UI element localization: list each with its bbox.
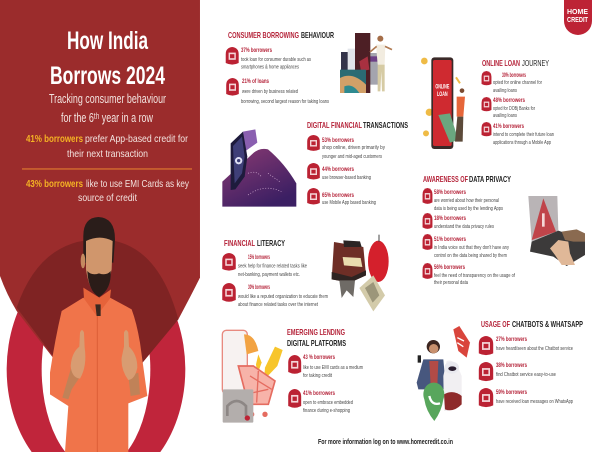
stat: 41%	[303, 390, 353, 414]
stat: 58%: data is being used by the lending Apps	[434, 206, 503, 212]
heading	[287, 327, 346, 348]
left hero panel	[0, 0, 200, 452]
stat: 53%: 53% borrowers	[322, 137, 354, 144]
icon: help	[222, 253, 236, 271]
stat: 38%: 38% borrowers	[496, 362, 527, 369]
stat: 27%: 27% borrowers	[496, 336, 527, 343]
stat: 65%: use Mobile App based banking	[322, 200, 376, 206]
icon: chatbot	[479, 336, 493, 355]
main title	[50, 27, 165, 90]
heading: EMERGING LENDING	[287, 327, 345, 337]
stat: 30%: availing loans	[493, 88, 517, 94]
stat: 41%: intend to complete their future loan	[493, 132, 554, 138]
stat: 15%: seek help for finance related tasks like	[238, 264, 307, 270]
highlight: app-based credit: their next transaction	[67, 148, 148, 160]
stat: 41%	[493, 123, 554, 146]
stat: 65%: 65% borrowers	[322, 192, 354, 199]
stat: 59%	[496, 389, 573, 405]
stat: 51%: 51% borrowers	[434, 236, 466, 243]
stat: 30%	[493, 72, 542, 94]
heading: ONLINE LOAN	[482, 58, 520, 68]
stat: 48%: opted for DOBj Banks for	[493, 106, 535, 112]
image: purple phone and card	[222, 129, 296, 207]
stat: 30%	[237, 284, 328, 308]
stat: 56%: 56% borrowers	[434, 264, 465, 271]
heading: TRANSACTIONS	[363, 120, 408, 130]
stat: 37%	[241, 47, 311, 70]
stat: 30%: opted for online channel for	[493, 80, 542, 86]
stat: 30%: would like a reputed organization to educate them	[237, 294, 328, 300]
stat: 37%: smartphones & home appliances	[241, 64, 299, 70]
icon: bank	[482, 97, 491, 111]
stat: 41%: 41% borrowers	[493, 123, 524, 130]
stat: 43%: like to use EMI cards as a medium	[303, 365, 363, 371]
stat: 51%	[434, 236, 509, 259]
heading: DIGITAL PLATFORMS	[287, 338, 346, 348]
image: wallet, cash and piggy bank	[332, 235, 389, 311]
subtitle: for the 6ᵗʰ year in a row	[61, 110, 153, 125]
stat: 18%	[434, 215, 494, 230]
section: consumer borrowing behaviour	[226, 30, 392, 105]
stat: 18%: understand the data privacy rules	[434, 224, 494, 230]
stat: 41%: open to embrace embedded	[303, 400, 353, 406]
Home Credit logo	[564, 0, 592, 35]
stat: 56%: their personal data	[434, 280, 468, 286]
Home Credit logo: CREDIT	[567, 15, 588, 24]
stat: 53%: shop online, driven primarily by	[322, 145, 385, 151]
section: digital financial transactions	[222, 120, 408, 207]
icon: control	[423, 234, 432, 250]
stat: 43%: 43 % borrowers	[303, 354, 335, 361]
icon: card	[288, 355, 301, 374]
stat: 38%	[496, 362, 556, 378]
icon: briefcase	[226, 78, 239, 96]
heading: CONSUMER BORROWING	[228, 30, 299, 40]
icon: cart	[288, 389, 301, 408]
stat: 41%: applications through a Mobile App	[493, 140, 551, 146]
highlight: EMI cards	[26, 178, 190, 204]
heading: DIGITAL FINANCIAL	[307, 120, 362, 130]
image: laptop with warning triangle	[528, 196, 585, 266]
stat: 27%	[496, 336, 573, 352]
stat: 37%: 37% borrowers	[241, 47, 272, 54]
footer link: For more information log on to www.homecredit.co.in	[318, 437, 453, 446]
highlight: app-based credit: 41% borrowers	[26, 133, 83, 145]
stat: 56%: feel the need of transparency on the usage of	[434, 273, 515, 279]
highlight: EMI cards: like to use EMI Cards as key	[86, 178, 190, 190]
stat: 21%: were driven by business related	[241, 89, 298, 95]
heading: USAGE OF	[481, 319, 510, 329]
dark inner arc	[17, 239, 178, 416]
Home Credit logo: HOME	[567, 7, 588, 16]
stat: 30%: 30% borrowers	[502, 72, 526, 79]
icon: rules	[423, 213, 432, 229]
image: appliances and man	[340, 33, 392, 93]
highlight: EMI cards: 43% borrowers	[26, 178, 83, 190]
image: phone with online loan	[421, 57, 465, 149]
stat: 21%: 21% of loans	[242, 78, 269, 85]
stat: 30%: 30% borrowers	[248, 284, 270, 291]
subtitle: Tracking consumer behaviour	[49, 91, 166, 106]
icon: transparency	[423, 263, 432, 279]
main title: Borrows 2024	[50, 62, 165, 90]
stat: 48%	[493, 97, 535, 119]
stat: 18%: 18% borrowers	[434, 215, 466, 222]
stat: 48%: availing loans	[493, 113, 517, 119]
stat: 37%: took loan for consumer durable such as	[241, 57, 311, 63]
stat: 41%: 41% borrowers	[303, 390, 335, 397]
heading: FINANCIAL	[224, 238, 255, 248]
stat: 65%	[322, 192, 376, 206]
stat: 59%: 59% borrowers	[496, 389, 527, 396]
icon: mobile	[482, 122, 491, 136]
stat: 51%: control on the data being shared by them	[434, 253, 507, 259]
heading: LITERACY	[257, 238, 285, 248]
heading: DATA PRIVACY	[469, 174, 511, 184]
stat: 15%: net-banking, payment wallets etc.	[238, 272, 300, 278]
icon: worried	[423, 188, 432, 204]
image: phone with online loan: LOAN	[437, 92, 448, 98]
highlight: EMI cards: source of credit	[78, 192, 137, 204]
stat: 43%	[303, 354, 363, 379]
stat: 21%: borrowing, second largest reason for taking loans	[241, 99, 329, 105]
stat: 59%: have received loan messages on WhatsApp	[496, 399, 573, 405]
highlight: app-based credit	[26, 133, 188, 160]
stat: 44%: 44% borrowers	[322, 166, 354, 173]
stat: 44%: use browser-based banking	[322, 175, 371, 181]
stat: 15%	[238, 254, 307, 278]
heading: AWARENESS OF	[423, 174, 468, 184]
stat: 44%	[322, 166, 371, 181]
subtitle	[49, 91, 166, 125]
stat: 43%: for taking credit	[303, 373, 332, 379]
stat: 53%	[322, 137, 385, 160]
stat: 38%: find Chatbot service easy-to-use	[496, 372, 556, 378]
icon: organization	[222, 283, 236, 302]
icon: browser	[307, 163, 320, 180]
heading: BEHAVIOUR	[301, 30, 334, 40]
image: phone with online loan: ONLINE	[435, 84, 449, 90]
stat: 56%	[434, 264, 515, 286]
icon: appliance	[226, 47, 239, 65]
section: online loan journey	[421, 57, 554, 149]
stat: 53%: younger and mid-aged customers	[322, 154, 382, 160]
stat: 51%: in India voice out that they don't have any	[434, 245, 509, 251]
stat: 41%: finance during e-shopping	[303, 408, 350, 414]
image: woman, robot and WhatsApp icon	[417, 326, 470, 421]
icon: whatsapp messages	[479, 388, 493, 407]
stat: 27%: have heard/seen about the Chatbot service	[496, 346, 573, 352]
image: phone, cart, bell and card	[222, 330, 283, 423]
highlight: app-based credit: prefer App-based credit for	[85, 133, 188, 145]
icon: mobile app	[307, 188, 320, 204]
section: awareness of data privacy	[423, 174, 585, 286]
main title: How India	[67, 27, 149, 55]
stat: 30%: about finance related tasks over the internet	[238, 302, 318, 308]
section: financial literacy	[222, 235, 389, 311]
stat: 15%: 15% borrowers	[248, 254, 270, 261]
section: usage of chatbots and whatsapp	[417, 319, 583, 421]
icon: easy use	[479, 362, 493, 381]
icon: online shopping	[307, 135, 320, 151]
icon: online channel	[482, 71, 491, 85]
stat: 58%	[434, 189, 503, 212]
red ring	[7, 250, 185, 452]
stat: 48%: 48% borrowers	[493, 97, 525, 104]
stat: 58%: 58% borrowers	[434, 189, 466, 196]
section: emerging lending digital platforms	[222, 327, 363, 423]
stat: 21%	[241, 78, 329, 105]
heading: JOURNEY	[522, 58, 549, 68]
man in orange kurta, thumbs up	[50, 217, 147, 452]
stat: 58%: are worried about how their personal	[434, 198, 499, 204]
maroon panel background	[0, 0, 200, 416]
